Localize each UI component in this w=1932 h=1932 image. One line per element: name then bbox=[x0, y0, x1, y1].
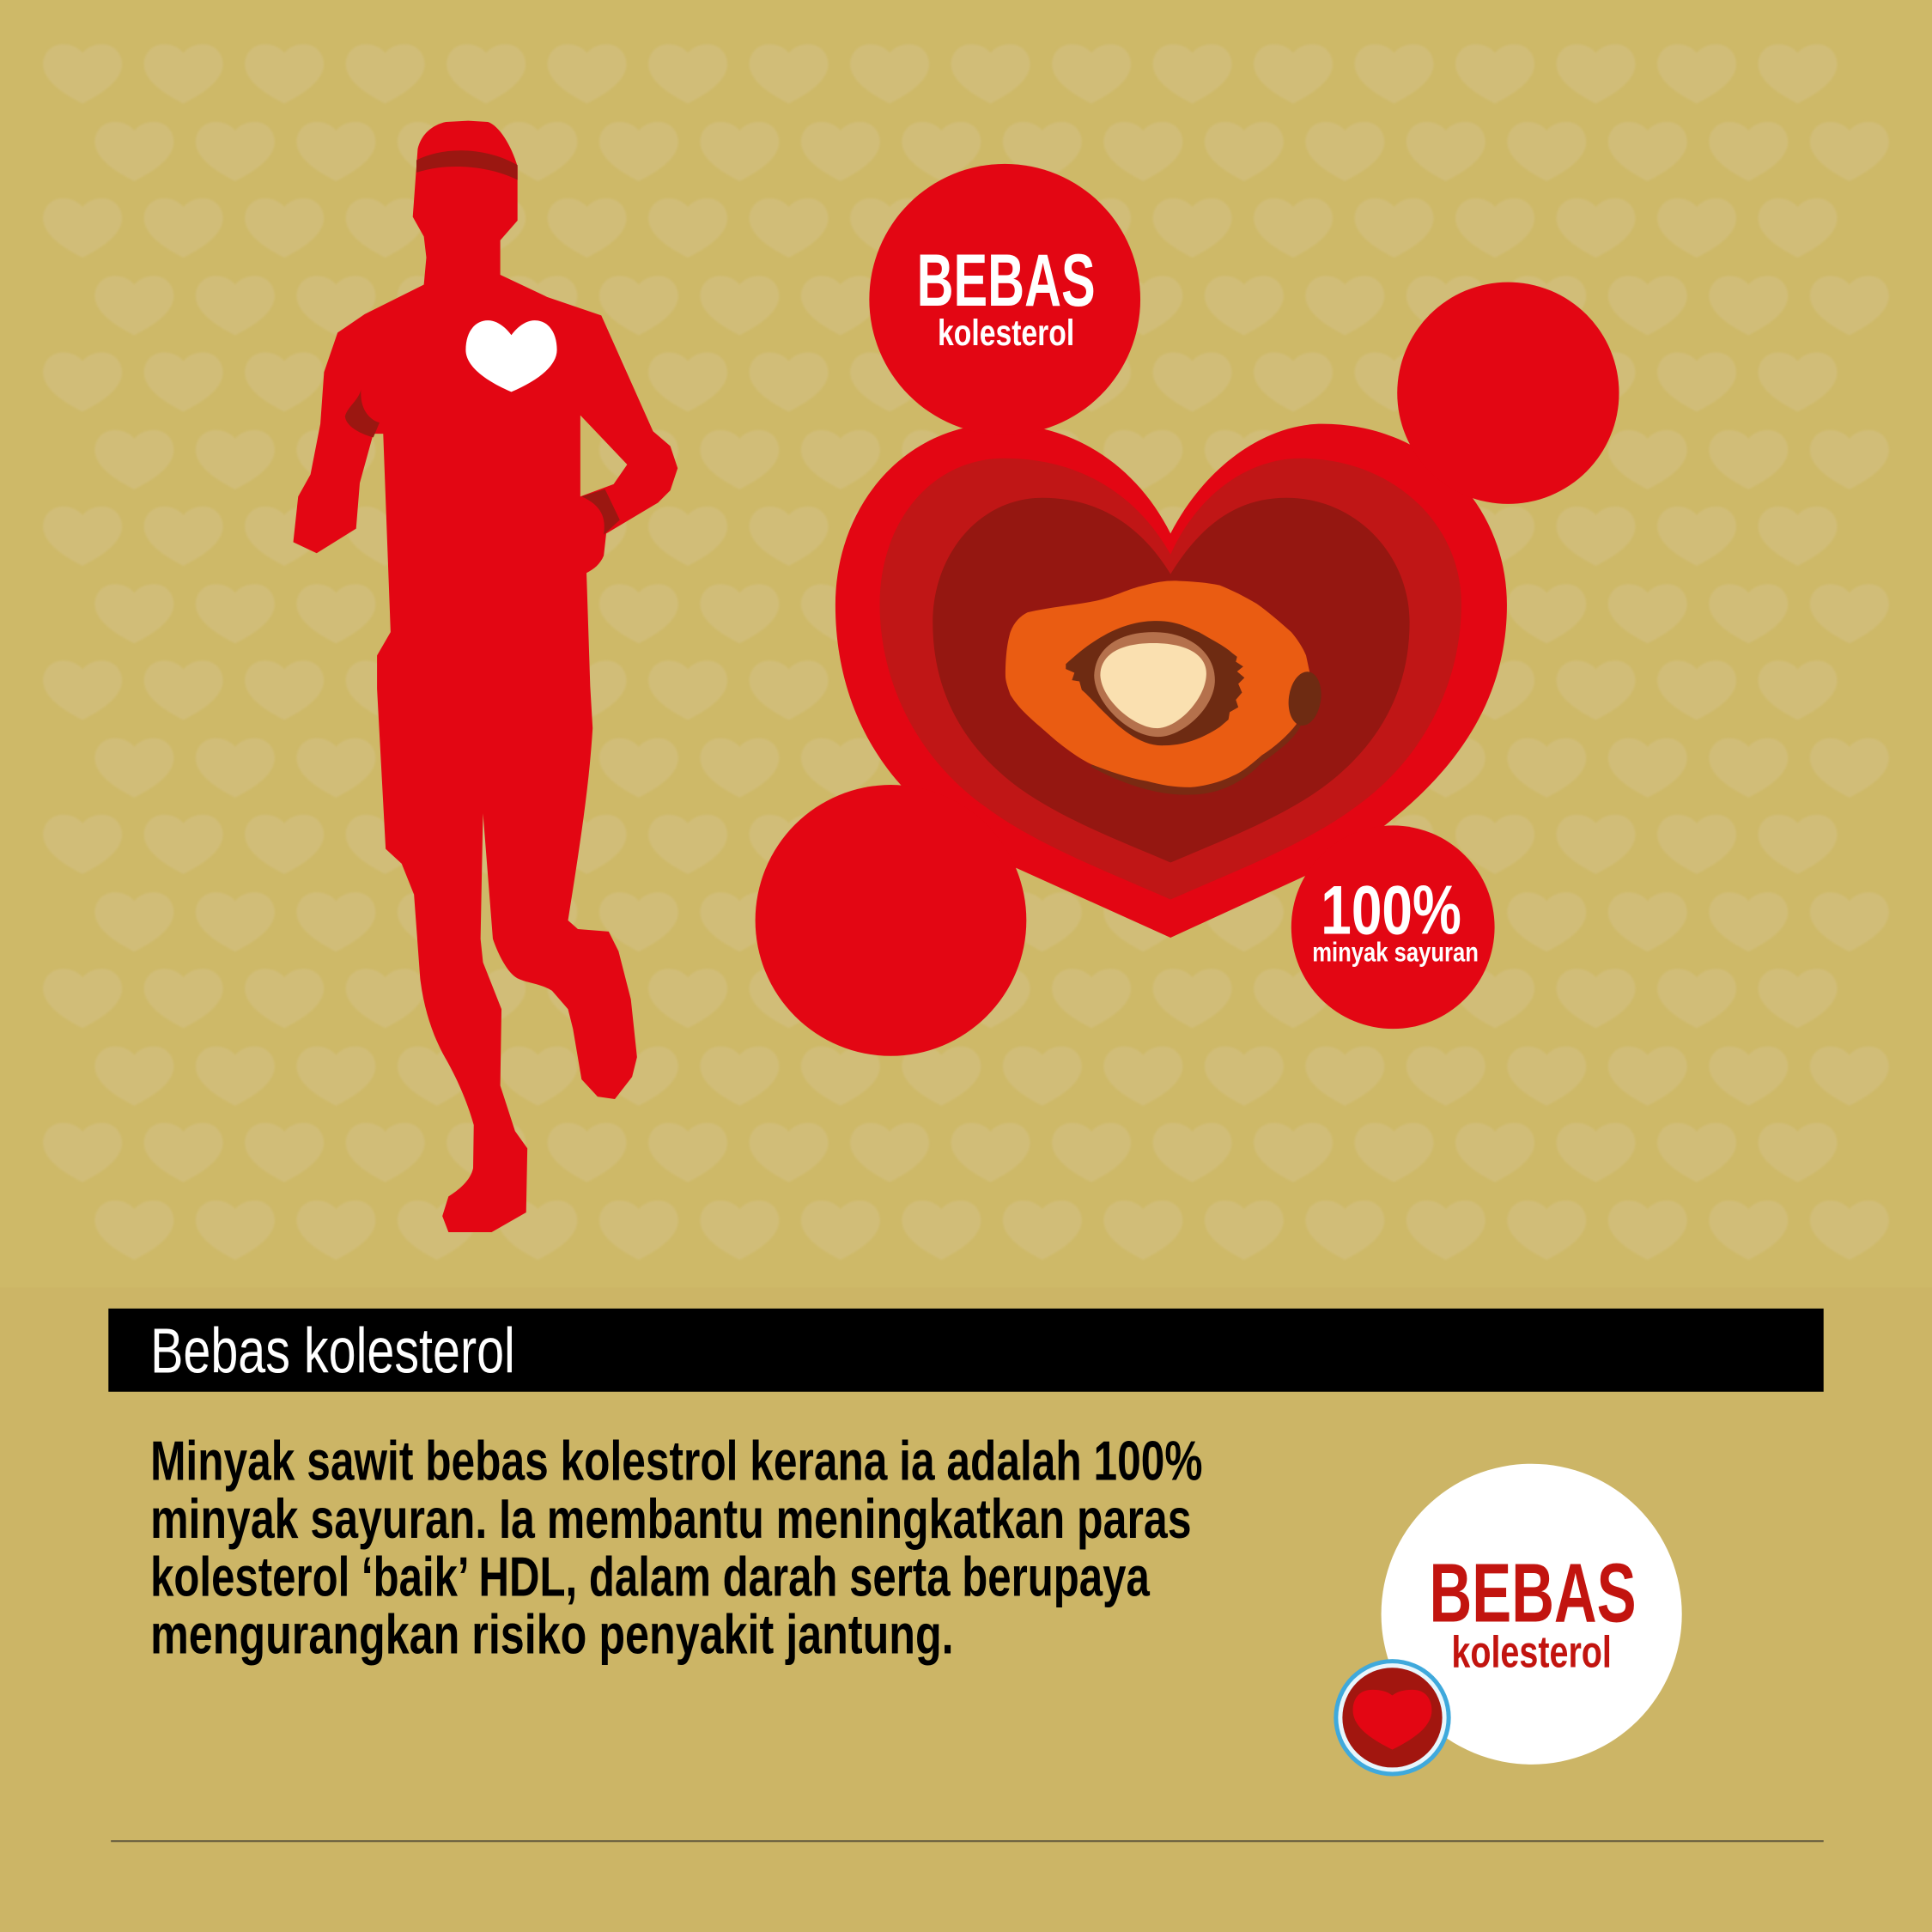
circle: bebas kolesterol: BEBAS bbox=[917, 240, 1096, 322]
kernel bbox=[1100, 643, 1206, 728]
body text: Minyak sawit bebas kolestrol kerana ia adalah 100% bbox=[150, 1430, 1203, 1492]
circle: bebas kolesterol bbox=[869, 164, 1140, 435]
circle: 100% minyak sayuran: 100% bbox=[1321, 872, 1461, 950]
palm fruit bbox=[1005, 580, 1324, 795]
heart with palm fruit bbox=[835, 424, 1507, 938]
circle: 100% minyak sayuran bbox=[1291, 825, 1495, 1029]
outer heart bbox=[835, 424, 1507, 938]
inner heart bbox=[933, 498, 1410, 862]
armpit shadow bbox=[345, 389, 380, 437]
fruit ring bbox=[1094, 632, 1215, 737]
circle: top right bbox=[1397, 283, 1619, 504]
title bar: Bebas kolesterol bbox=[150, 1315, 515, 1387]
white badge: bebas kolesterol: BEBAS bbox=[1430, 1546, 1637, 1639]
middle heart bbox=[880, 459, 1461, 900]
white badge: bebas kolesterol: kolesterol bbox=[1451, 1626, 1612, 1676]
body text bbox=[150, 1430, 1203, 1666]
circle: 100% minyak sayuran: minyak sayuran bbox=[1312, 936, 1479, 967]
runner silhouette bbox=[294, 121, 677, 1232]
fruit stem bbox=[1285, 670, 1324, 727]
fruit shell bbox=[1066, 621, 1244, 745]
headband bbox=[416, 150, 518, 180]
white badge: bebas kolesterol bbox=[1382, 1464, 1682, 1765]
body text: mengurangkan risiko penyakit jantung. bbox=[150, 1604, 954, 1666]
icon: heart in blue ring bbox=[1334, 1659, 1451, 1776]
title bar bbox=[108, 1309, 1824, 1392]
body text: kolesterol ‘baik’ HDL, dalam darah serta berupaya bbox=[150, 1546, 1151, 1607]
circle: bottom left bbox=[756, 785, 1026, 1056]
circle: bebas kolesterol: kolesterol bbox=[938, 313, 1074, 354]
body text: minyak sayuran. Ia membantu meningkatkan paras bbox=[150, 1488, 1192, 1550]
white chest heart bbox=[465, 320, 557, 392]
wristband bbox=[581, 489, 620, 535]
background heart pattern bbox=[32, 43, 1900, 1353]
